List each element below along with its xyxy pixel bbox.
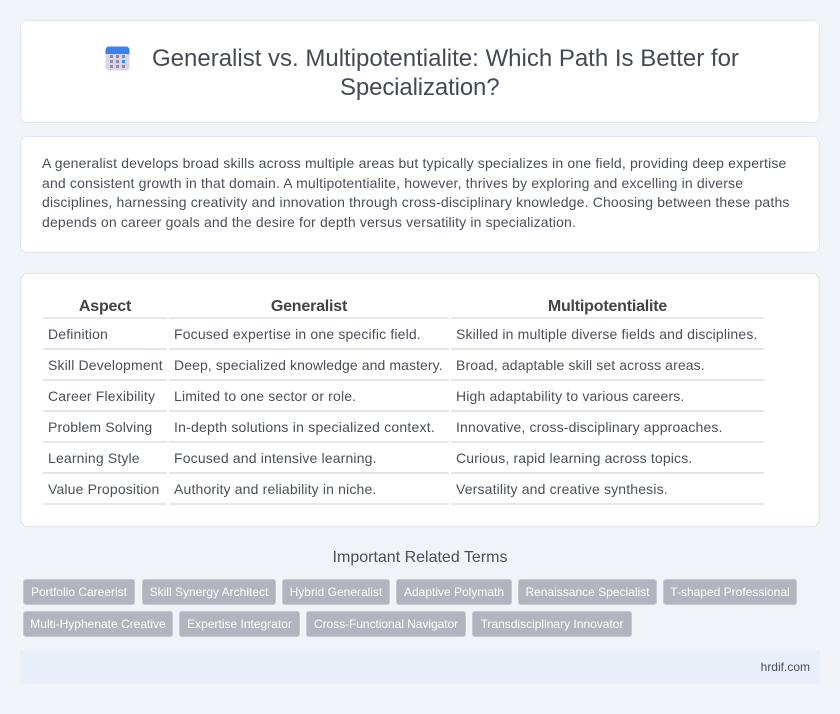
comparison table: In-depth solutions in specialized context. <box>174 419 435 435</box>
comparison table: Generalist <box>271 298 347 315</box>
text block: introduction: and consistent growth in that domain. A multipotentialite, however, thrives by exploring and excelling in diverse <box>42 175 743 191</box>
comparison table: Broad, adaptable skill set across areas. <box>456 357 705 373</box>
comparison table: Curious, rapid learning across topics. <box>456 450 692 466</box>
title: Generalist vs. Multipotentialite: Which Path Is Better for <box>152 45 739 72</box>
related term tags: Cross-Functional Navigator <box>314 617 458 631</box>
text block: introduction: disciplines, harnessing creativity and innovation through cross-disciplinary knowledge. Choosing between these paths <box>42 194 790 210</box>
comparison table: High adaptability to various careers. <box>456 388 684 404</box>
related term tags: T-shaped Professional <box>670 585 790 599</box>
footer bar <box>20 650 820 684</box>
related term tags: Adaptive Polymath <box>404 585 504 599</box>
related term tags: Portfolio Careerist <box>31 585 127 599</box>
related term tags: Transdisciplinary Innovator <box>481 617 623 631</box>
comparison table: Definition <box>48 326 108 342</box>
comparison table: Deep, specialized knowledge and mastery. <box>174 357 443 373</box>
comparison table: Versatility and creative synthesis. <box>456 481 668 497</box>
text block: introduction: A generalist develops broad skills across multiple areas but typically specializes in one field, providing deep expertise <box>42 155 786 171</box>
comparison table: Skilled in multiple diverse fields and disciplines. <box>456 326 758 342</box>
panel: title card <box>20 20 820 123</box>
related term tags: Expertise Integrator <box>187 617 292 631</box>
comparison table: Focused and intensive learning. <box>174 450 377 466</box>
comparison table: Multipotentialite <box>548 298 667 315</box>
related term tags: Hybrid Generalist <box>290 585 382 599</box>
title <box>152 45 739 101</box>
comparison table: Skill Development <box>48 357 163 373</box>
comparison table: Problem Solving <box>48 419 152 435</box>
comparison table: Authority and reliability in niche. <box>174 481 376 497</box>
comparison table: Learning Style <box>48 450 140 466</box>
panel: comparison table <box>20 273 820 527</box>
icon: calendar <box>106 46 130 70</box>
comparison table: Career Flexibility <box>48 388 155 404</box>
related term tags: Multi-Hyphenate Creative <box>30 617 166 631</box>
panel: introduction <box>20 136 820 253</box>
related term tags: Skill Synergy Architect <box>150 585 268 599</box>
related term tags <box>23 579 797 637</box>
related term tags: Renaissance Specialist <box>525 585 650 599</box>
comparison table: Innovative, cross-disciplinary approaches. <box>456 419 723 435</box>
footer source: hrdif.com <box>761 660 810 674</box>
text block: introduction: depends on career goals and the desire for depth versus versatility in specialization. <box>42 214 576 230</box>
comparison table: Value Proposition <box>48 481 159 497</box>
heading: related terms: Important Related Terms <box>333 549 507 566</box>
title: Specialization? <box>340 74 500 101</box>
comparison table: Limited to one sector or role. <box>174 388 356 404</box>
comparison table: Focused expertise in one specific field. <box>174 326 421 342</box>
text block: introduction <box>42 155 790 230</box>
comparison table <box>43 298 764 505</box>
comparison table: Aspect <box>79 298 131 315</box>
